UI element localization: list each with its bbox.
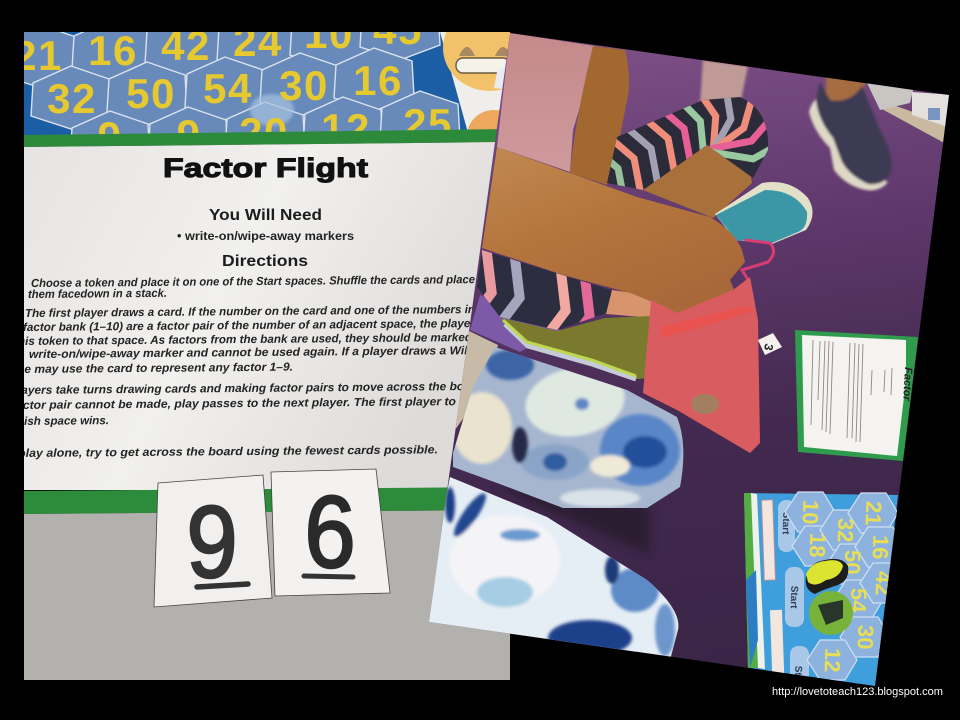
mini hexes (785, 492, 835, 532)
mini game board: 30 (853, 625, 878, 650)
teal sneaker (715, 182, 813, 244)
website url: http://lovetoteach123.blogspot.com (772, 686, 943, 698)
game board hexagons: 10 (304, 10, 354, 57)
green band top (24, 129, 510, 147)
directions text: finish space wins. (10, 415, 109, 428)
game board hexagons: 30 (279, 62, 329, 109)
start pills (778, 500, 809, 696)
directions text: them facedown in a stack. (28, 288, 167, 301)
mini game board: 10 (798, 500, 823, 525)
small number card (758, 333, 782, 355)
mini game board: 18 (805, 533, 830, 558)
card title: Factor (900, 367, 914, 402)
lower striped leggings (477, 250, 612, 330)
background classroom items (867, 83, 949, 142)
mini game board: 50 (840, 550, 865, 575)
start pills: Start (792, 666, 803, 689)
game board hexagons: 24 (233, 18, 283, 65)
shoelace (742, 240, 774, 283)
you will need heading: You Will Need (209, 207, 322, 224)
instruction sheet (24, 142, 510, 490)
game board hexagons: 9 (177, 111, 201, 158)
small number card: 3 (761, 343, 776, 352)
upper knee floral pants (445, 340, 690, 515)
game board hexagons: 20 (239, 109, 289, 156)
game board hexagons: 50 (126, 70, 176, 117)
shirt (497, 33, 594, 172)
skin patch behind bag (606, 290, 651, 316)
mini game board: 54 (846, 588, 871, 614)
shadow between knees (490, 485, 650, 555)
directions text: his token to that space. As factors from the bank are used, they should be marked (18, 332, 473, 348)
number card 9: 9 (186, 484, 238, 599)
background leg (700, 60, 748, 104)
game board hexagons: 9 (98, 113, 122, 160)
directions heading: Directions (222, 253, 308, 270)
game board hexagons: 42 (161, 22, 211, 69)
directions text: write-on/wipe-away marker and cannot be used again. If a player draws a Wild (29, 345, 476, 361)
directions text: factor pair cannot be made, play passes to the next player. The first player to (12, 396, 456, 412)
carpet (420, 20, 960, 700)
game board hexagons: 54 (203, 65, 253, 112)
game board hexagons: 16 (353, 57, 403, 104)
number card 6: 6 (304, 474, 356, 589)
green token (809, 591, 853, 635)
panel: right photo of students playing (420, 20, 960, 700)
directions text: factor bank (1–10) are a factor pair of the number of an adjacent space, the player (23, 318, 476, 334)
title: Factor Flight (163, 153, 368, 183)
game board hexagons (24, 32, 468, 135)
mini game board: 32 (833, 518, 858, 543)
crossed shin (643, 145, 752, 218)
lower knee floral pants (420, 470, 690, 665)
directions text: he may use the card to represent any factor 1–9. (17, 362, 293, 376)
mini game board: 16 (868, 535, 893, 560)
directions text (10, 274, 486, 460)
upper arm (570, 46, 629, 185)
direction card on floor (795, 330, 918, 461)
mini game board: 12 (820, 648, 845, 673)
game board hexagons: 12 (321, 105, 371, 152)
light carpet patch (470, 295, 560, 352)
directions text: The first player draws a card. If the number on the card and one of the numbers in (25, 304, 475, 320)
mini game board: 21 (861, 501, 886, 526)
game board hexagons: 25 (403, 100, 453, 147)
table surface (24, 510, 510, 680)
bank strips (762, 500, 775, 580)
directions text: Choose a token and place it on one of the Start spaces. Shuffle the cards and place (31, 274, 476, 290)
red plastic bag (643, 277, 760, 453)
game board hexagons: 21 (13, 32, 63, 79)
moving dark shoe (809, 74, 892, 190)
game board hexagons: 16 (88, 27, 138, 74)
number card 6 (271, 469, 390, 596)
mini game board: 42 (871, 571, 896, 596)
directions text: play alone, try to get across the board using the fewest cards possible. (17, 444, 438, 460)
yellow token (806, 559, 848, 594)
panel: left photo of game directions (24, 32, 510, 680)
reaching arm (482, 147, 745, 316)
directions text: Players take turns drawing cards and making factor pairs to move across the board. (10, 381, 486, 397)
start pills: Start (788, 586, 799, 609)
board edge with emoji stickers (440, 32, 510, 142)
upper striped leggings (607, 97, 768, 190)
game board hexagons: 45 (373, 6, 423, 53)
green sneaker sole (502, 316, 652, 379)
cream fabric (455, 330, 498, 430)
game board hexagons: 32 (47, 75, 97, 122)
number card 9 (154, 475, 272, 607)
mini game board (744, 491, 898, 686)
green band bottom (24, 488, 448, 514)
start pills: Start (780, 512, 791, 535)
materials list: • write-on/wipe-away markers (177, 231, 354, 243)
